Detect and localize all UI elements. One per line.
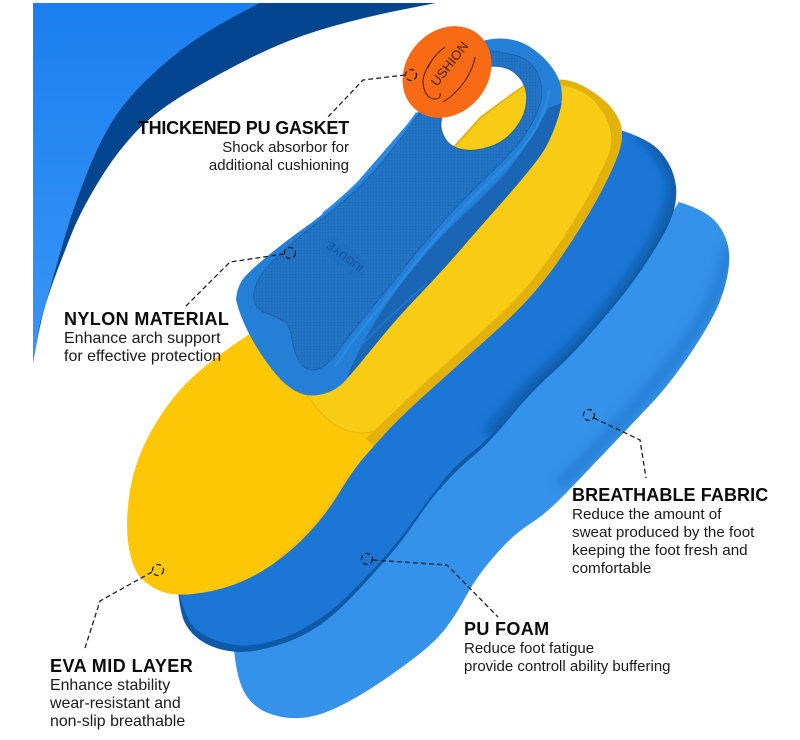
label: EVA mid layer [50,656,193,730]
label: nylon material: Enhance arch support [64,330,221,347]
label: breathable fabric: comfortable [572,560,651,577]
label: PU foam: Reduce foot fatigue [464,640,594,657]
label: nylon material: for effective protection [64,348,221,365]
callout line: nylon [185,248,296,307]
label: EVA mid layer: non-slip breathable [50,713,185,730]
label: breathable fabric: keeping the foot fresh and [572,542,748,559]
dark side wall [347,103,562,378]
label: PU foam [464,619,671,675]
callout line: gasket [328,70,416,117]
EVA mid layer [127,60,640,595]
dotted inner panel [254,50,542,370]
label: nylon material [64,309,229,365]
brand mark: IUGUYE [325,239,366,274]
label: nylon material: NYLON MATERIAL [64,309,229,329]
orange cushion disc [384,8,510,136]
label: EVA mid layer: wear-resistant and [50,695,181,712]
label: thickened PU gasket [138,118,350,174]
label: thickened PU gasket: THICKENED PU GASKET [138,118,349,138]
label: breathable fabric: Reduce the amount of [572,506,721,523]
label: breathable fabric: sweat produced by the foot [572,524,754,541]
label: breathable fabric: BREATHABLE FABRIC [572,485,768,505]
bright ridges [335,90,549,366]
label: EVA mid layer: Enhance stability [50,677,170,694]
label: thickened PU gasket: Shock absorbor for [222,139,349,156]
background swoosh [33,3,436,363]
label: PU foam: PU FOAM [464,619,549,639]
top blue arch piece [236,38,562,396]
PU foam layer [178,130,676,652]
breathable fabric layer [234,202,730,718]
label: thickened PU gasket: additional cushioning [209,157,349,174]
label: EVA mid layer: EVA MID LAYER [50,656,193,676]
callout line: foam [362,554,498,617]
label: PU foam: provide controll ability buffering [464,658,671,675]
callout line: breathable [584,410,646,478]
callout line: eva [85,564,164,648]
orange cushion disc: USHION [428,39,471,89]
brand mark [319,234,371,280]
label: breathable fabric [572,485,768,577]
